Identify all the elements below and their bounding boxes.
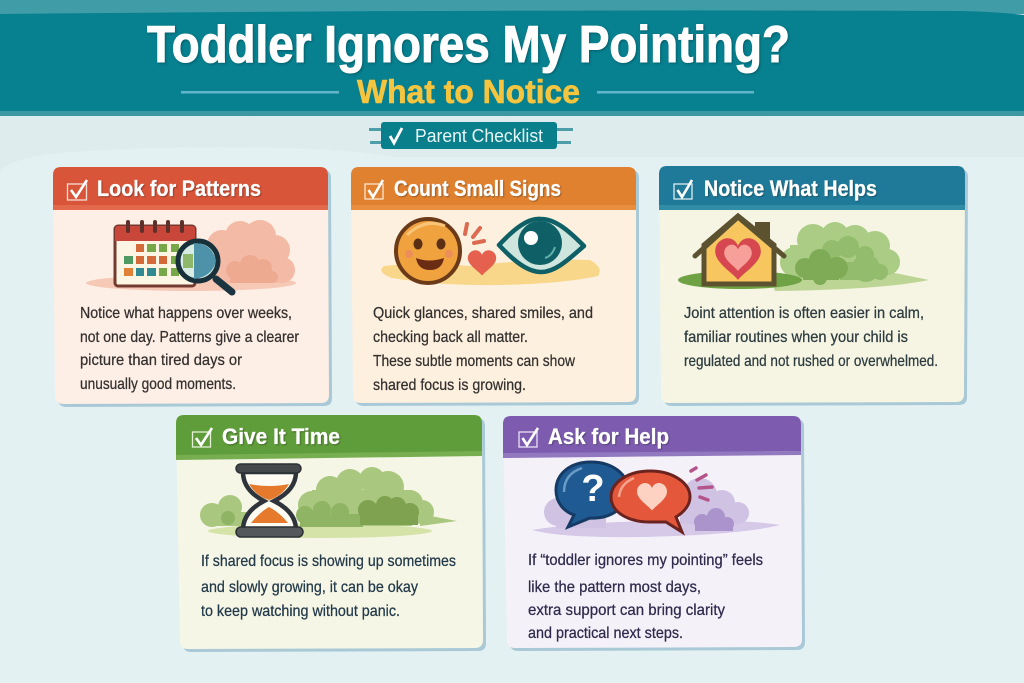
body text: ask for help: [528, 552, 763, 642]
body text: notice what helps: familiar routines when your child is: [684, 329, 908, 346]
icon: hourglass and bushes: [200, 464, 457, 538]
icon: speech bubbles: ?: [581, 468, 605, 510]
panel: ask for help: [503, 416, 805, 651]
body text: give it time: If shared focus is showing up sometimes: [201, 553, 456, 570]
background wave panel: [0, 147, 1024, 683]
panel: notice what helps: [659, 166, 968, 406]
body text: count small signs: Quick glances, shared smiles, and: [373, 305, 593, 322]
icon: smiley, heart and eye: [381, 219, 600, 285]
panel: count small signs: [351, 167, 639, 406]
header: give it time: [176, 415, 482, 460]
icon: calendar with magnifying glass: [86, 220, 296, 292]
header: look for patterns: [53, 167, 328, 210]
body text: notice what helps: Joint attention is often easier in calm,: [684, 305, 924, 322]
panel: look for patterns: [53, 167, 332, 407]
body text: count small signs: checking back all matter.: [373, 329, 528, 346]
body text: count small signs: shared focus is growing.: [373, 377, 526, 394]
body text: look for patterns: picture than tired days or: [80, 352, 243, 369]
body text: give it time: [201, 553, 456, 620]
body text: count small signs: [373, 305, 593, 394]
body text: look for patterns: unusually good moments.: [80, 376, 236, 393]
icon: speech bubbles: [532, 462, 780, 537]
header: ask for help: Ask for Help: [548, 424, 669, 449]
header: count small signs: [351, 167, 636, 210]
subtitle: What to Notice: [357, 73, 580, 110]
body text: give it time: to keep watching without panic.: [201, 603, 400, 620]
body text: look for patterns: Notice what happens over weeks,: [80, 305, 292, 322]
panel: give it time: [176, 415, 486, 652]
header: ask for help: [503, 416, 801, 458]
body text: notice what helps: [684, 305, 938, 370]
body text: ask for help: If “toddler ignores my pointing” feels: [528, 552, 763, 569]
header: count small signs: Count Small Signs: [394, 176, 561, 201]
header: give it time: Give It Time: [222, 424, 340, 449]
body text: notice what helps: regulated and not rushed or overwhelmed.: [684, 353, 938, 370]
header: notice what helps: Notice What Helps: [704, 176, 877, 201]
body text: look for patterns: [80, 305, 300, 393]
icon: house with heart and bushes: [678, 216, 929, 291]
body text: give it time: and slowly growing, it can be okay: [201, 579, 418, 596]
badge: parent checklist: [369, 122, 573, 149]
body text: count small signs: These subtle moments can show: [373, 353, 575, 370]
badge: parent checklist: Parent Checklist: [415, 126, 543, 146]
header banner: [0, 0, 1024, 116]
title: Toddler Ignores My Pointing?: [147, 16, 790, 74]
header: notice what helps: [659, 166, 965, 210]
body text: ask for help: like the pattern most days,: [528, 579, 701, 596]
body text: ask for help: extra support can bring clarity: [528, 602, 725, 619]
body text: ask for help: and practical next steps.: [528, 625, 683, 642]
header: look for patterns: Look for Patterns: [97, 176, 261, 201]
body text: look for patterns: not one day. Patterns give a clearer: [80, 329, 300, 346]
